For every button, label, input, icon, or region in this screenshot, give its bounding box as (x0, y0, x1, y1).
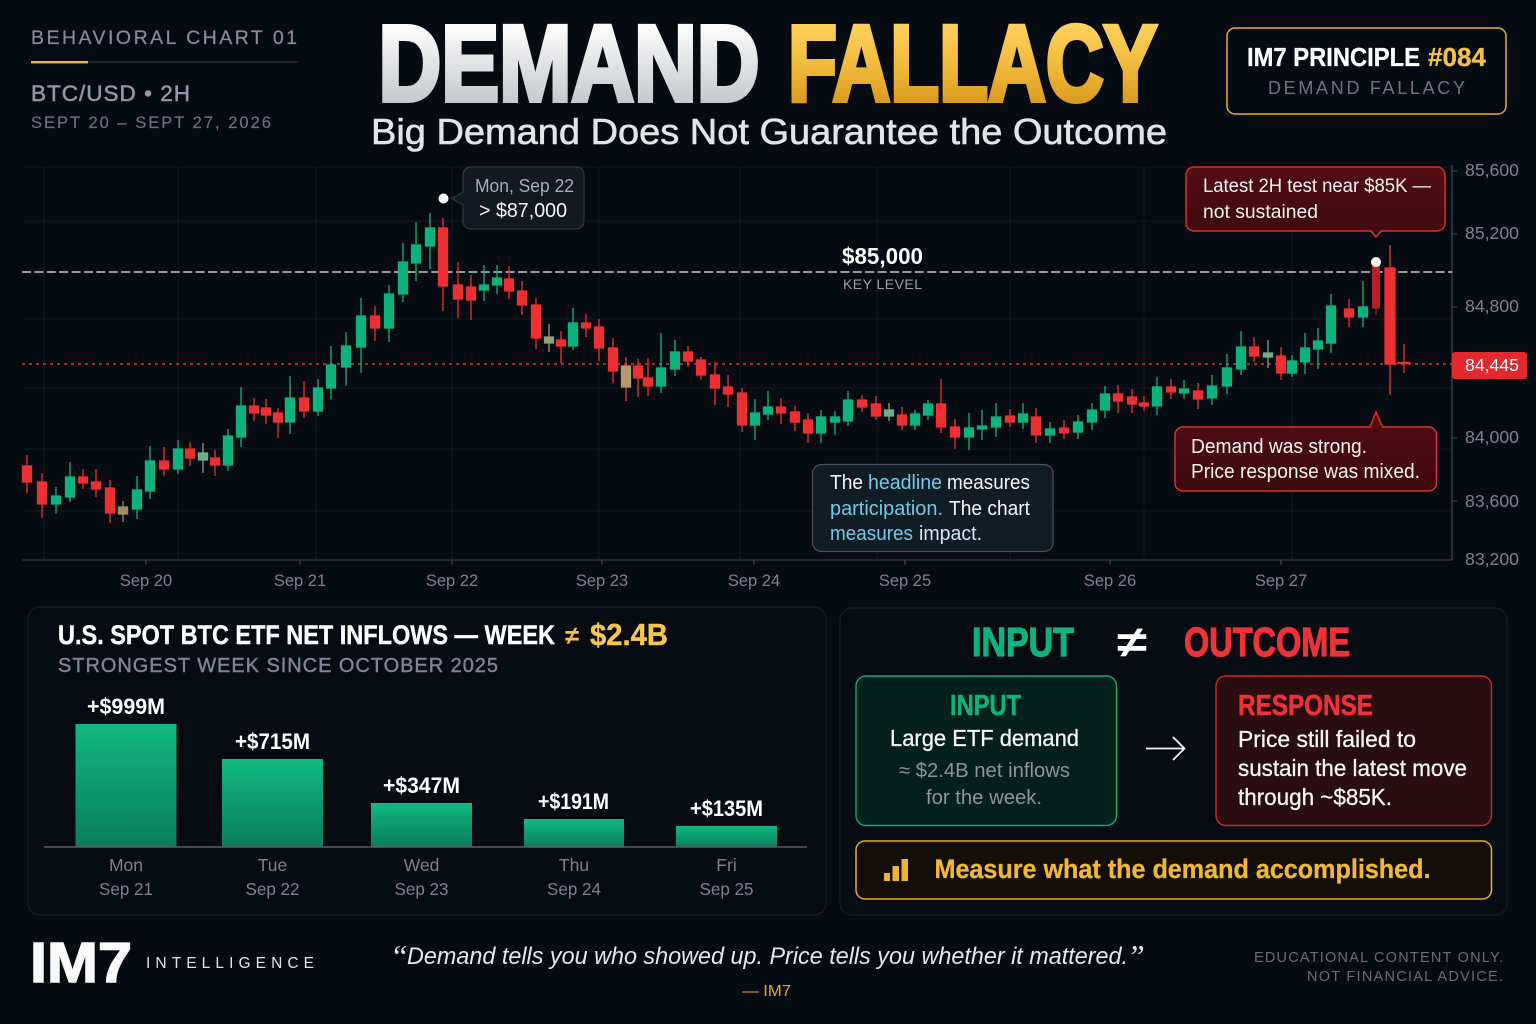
bar: Wednesday: Sep 23 (394, 879, 448, 899)
date axis labels (120, 572, 1307, 590)
arrow: input to response (1146, 737, 1184, 760)
key level label: KEY LEVEL (843, 276, 922, 292)
key level label (842, 243, 923, 292)
price axis labels: 85,600 (1465, 160, 1519, 180)
callout: headline vs chart: measures (947, 472, 1030, 494)
takeaway bar (856, 841, 1492, 899)
callout: headline vs chart (812, 464, 1053, 552)
date axis labels: Sep 25 (879, 572, 931, 590)
candlestick chart (22, 160, 1527, 590)
panel: input vs outcome (840, 608, 1507, 915)
date axis labels: Sep 22 (426, 572, 478, 590)
input card: for the week. (926, 787, 1042, 809)
peak marker dot (438, 194, 448, 204)
price axis labels (1465, 160, 1519, 569)
subtitle: Big Demand Does Not Guarantee the Outcome (371, 111, 1167, 152)
current price dotted line (22, 363, 1452, 365)
main title: FALLACY (788, 2, 1157, 124)
principle badge: IM7 PRINCIPLE (1247, 44, 1420, 72)
bar: Tuesday: Tue (258, 855, 287, 875)
principle badge: #084 (1428, 44, 1487, 72)
price axis labels: 84,000 (1465, 427, 1519, 447)
panel heading: U.S. SPOT BTC ETF NET INFLOWS — WEEK (58, 620, 555, 650)
bar: Tuesday: +$715M (235, 729, 310, 754)
callout: Monday high (452, 167, 584, 229)
callout: Monday high: Mon, Sep 22 (475, 176, 574, 196)
bar chart (44, 694, 807, 899)
price axis labels: 84,800 (1465, 296, 1519, 316)
input card (856, 676, 1116, 826)
heading: input not equal outcome: INPUT (972, 619, 1074, 665)
bar: Wednesday: Wed (404, 855, 439, 875)
panel: ETF net inflows (28, 607, 826, 915)
response card: sustain the latest move (1238, 755, 1467, 781)
neutral candles (118, 324, 1272, 522)
callout: headline vs chart: measures (830, 523, 913, 545)
principle badge: DEMAND FALLACY (1268, 78, 1465, 98)
bar: Thursday: Sep 24 (547, 879, 601, 899)
callout: demand was strong: Demand was strong. (1191, 436, 1367, 458)
date axis labels: Sep 20 (120, 572, 172, 590)
bar: Tuesday (222, 729, 323, 899)
response card: Price still failed to (1238, 726, 1416, 752)
input card: ≈ $2.4B net inflows (899, 760, 1070, 782)
heading: input not equal outcome: ≠ (1117, 618, 1147, 667)
icon: signal bars (884, 859, 908, 881)
bar: Wednesday (371, 773, 472, 899)
footer logo: INTELLIGENCE (146, 955, 314, 972)
main title: DEMAND (378, 2, 760, 124)
panel subheading: STRONGEST WEEK SINCE OCTOBER 2025 (58, 655, 498, 677)
key level dashed line at 85,000 (22, 271, 1452, 273)
footer logo: IM7 (30, 931, 132, 995)
panel heading: ≠ (565, 622, 579, 650)
bar: Wednesday: +$347M (383, 773, 460, 798)
current price tag: 84,445 (1465, 355, 1519, 375)
disclaimer: NOT FINANCIAL ADVICE. (1307, 969, 1503, 985)
current price tag (1452, 352, 1527, 379)
price axis labels: 85,200 (1465, 223, 1519, 243)
response card (1216, 676, 1492, 826)
price axis labels: 83,600 (1465, 491, 1519, 511)
red candles (22, 218, 1410, 523)
callout: headline vs chart: headline (868, 472, 942, 494)
bar: Friday: +$135M (690, 796, 763, 821)
chart axes (22, 165, 1457, 565)
bar: Thursday: +$191M (538, 789, 609, 814)
callout: headline vs chart: The chart (949, 498, 1030, 520)
green candles (52, 213, 1368, 519)
date axis labels: Sep 23 (576, 572, 628, 590)
callout: Monday high: > $87,000 (479, 200, 567, 222)
narrow test candle (1372, 262, 1380, 315)
bar: Monday (76, 694, 176, 899)
key level label: $85,000 (842, 243, 923, 269)
callout: demand was strong (1175, 412, 1436, 491)
footer quote: — IM7 (742, 983, 791, 1000)
footer quote: “ (390, 938, 408, 974)
callout: demand was strong: Price response was mixed. (1191, 461, 1420, 483)
date axis labels: Sep 24 (728, 572, 780, 590)
footer quote: Demand tells you who showed up. Price tells you whether it mattered. (407, 943, 1128, 970)
chart series label: BEHAVIORAL CHART 01 (31, 27, 297, 49)
disclaimer (1254, 950, 1503, 985)
response card: through ~$85K. (1238, 784, 1392, 810)
date axis labels: Sep 21 (274, 572, 326, 590)
takeaway bar: Measure what the demand accomplished. (934, 854, 1430, 884)
date range: SEPT 20 – SEPT 27, 2026 (31, 114, 271, 132)
input card: Large ETF demand (890, 725, 1079, 751)
disclaimer: EDUCATIONAL CONTENT ONLY. (1254, 950, 1503, 966)
bar: Thursday: Thu (559, 855, 589, 875)
panel heading: $2.4B (590, 617, 668, 652)
gold rule (31, 61, 298, 63)
callout: latest test: not sustained (1203, 201, 1318, 223)
callout: headline vs chart: The (830, 472, 863, 494)
bar: Friday: Fri (716, 855, 737, 875)
price axis labels: 83,200 (1465, 549, 1519, 569)
bar: Monday: Sep 21 (99, 879, 153, 899)
bar: Monday: +$999M (87, 694, 165, 719)
input card: INPUT (950, 690, 1021, 722)
heading: input not equal outcome: OUTCOME (1184, 619, 1350, 665)
bar: Tuesday: Sep 22 (246, 879, 300, 899)
footer quote: ” (1127, 938, 1145, 974)
latest test marker dot (1371, 257, 1381, 267)
response card: RESPONSE (1238, 690, 1373, 722)
header meta block (31, 27, 298, 132)
callout: headline vs chart: impact. (919, 523, 982, 545)
footer quote (390, 938, 1145, 1000)
bar: Thursday (524, 789, 624, 899)
date axis labels: Sep 26 (1084, 572, 1136, 590)
bar: Monday: Mon (109, 855, 143, 875)
footer logo (30, 931, 314, 995)
instrument label: BTC/USD • 2H (31, 81, 190, 106)
heading: input not equal outcome (972, 618, 1350, 667)
callout: latest test (1186, 167, 1445, 237)
bar: Friday (676, 796, 777, 899)
date axis labels: Sep 27 (1255, 572, 1307, 590)
main title (378, 2, 1157, 124)
bar: Friday: Sep 25 (700, 879, 754, 899)
principle badge (1227, 28, 1506, 114)
callout: headline vs chart: participation. (830, 498, 943, 520)
chart grid (22, 167, 1452, 559)
callout: latest test: Latest 2H test near $85K — (1203, 175, 1431, 197)
